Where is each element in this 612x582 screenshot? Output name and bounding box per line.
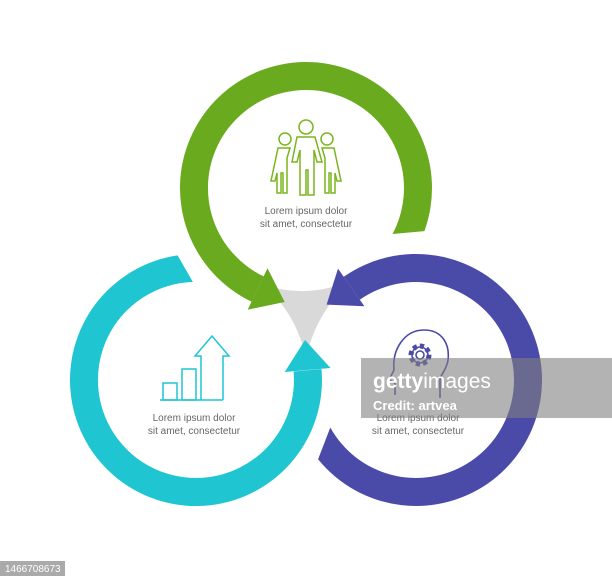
arrow: green bbox=[248, 268, 285, 310]
arrow: purple bbox=[327, 269, 364, 306]
ring: cyan bbox=[70, 255, 331, 506]
center triangle bbox=[262, 280, 352, 358]
arrow: cyan bbox=[285, 340, 330, 372]
text: sit amet, consectetur bbox=[260, 219, 353, 230]
icon: growth chart bbox=[160, 336, 229, 400]
text: sit amet, consectetur bbox=[372, 426, 465, 437]
ring: purple bbox=[318, 254, 542, 506]
watermark band: gettyimages bbox=[373, 370, 491, 393]
ring: green bbox=[180, 62, 432, 310]
text: sit amet, consectetur bbox=[148, 426, 241, 437]
id badge: 1466708673 bbox=[5, 564, 61, 575]
watermark band bbox=[361, 358, 612, 418]
text: green: Lorem ipsum dolor bbox=[265, 206, 348, 217]
text: purple: Lorem ipsum dolor bbox=[377, 413, 460, 424]
icon: people bbox=[271, 120, 341, 195]
icon: head gear bbox=[389, 330, 448, 398]
id badge bbox=[0, 561, 65, 576]
watermark band: Credit: artvea bbox=[373, 398, 458, 413]
text: cyan: Lorem ipsum dolor bbox=[153, 413, 236, 424]
